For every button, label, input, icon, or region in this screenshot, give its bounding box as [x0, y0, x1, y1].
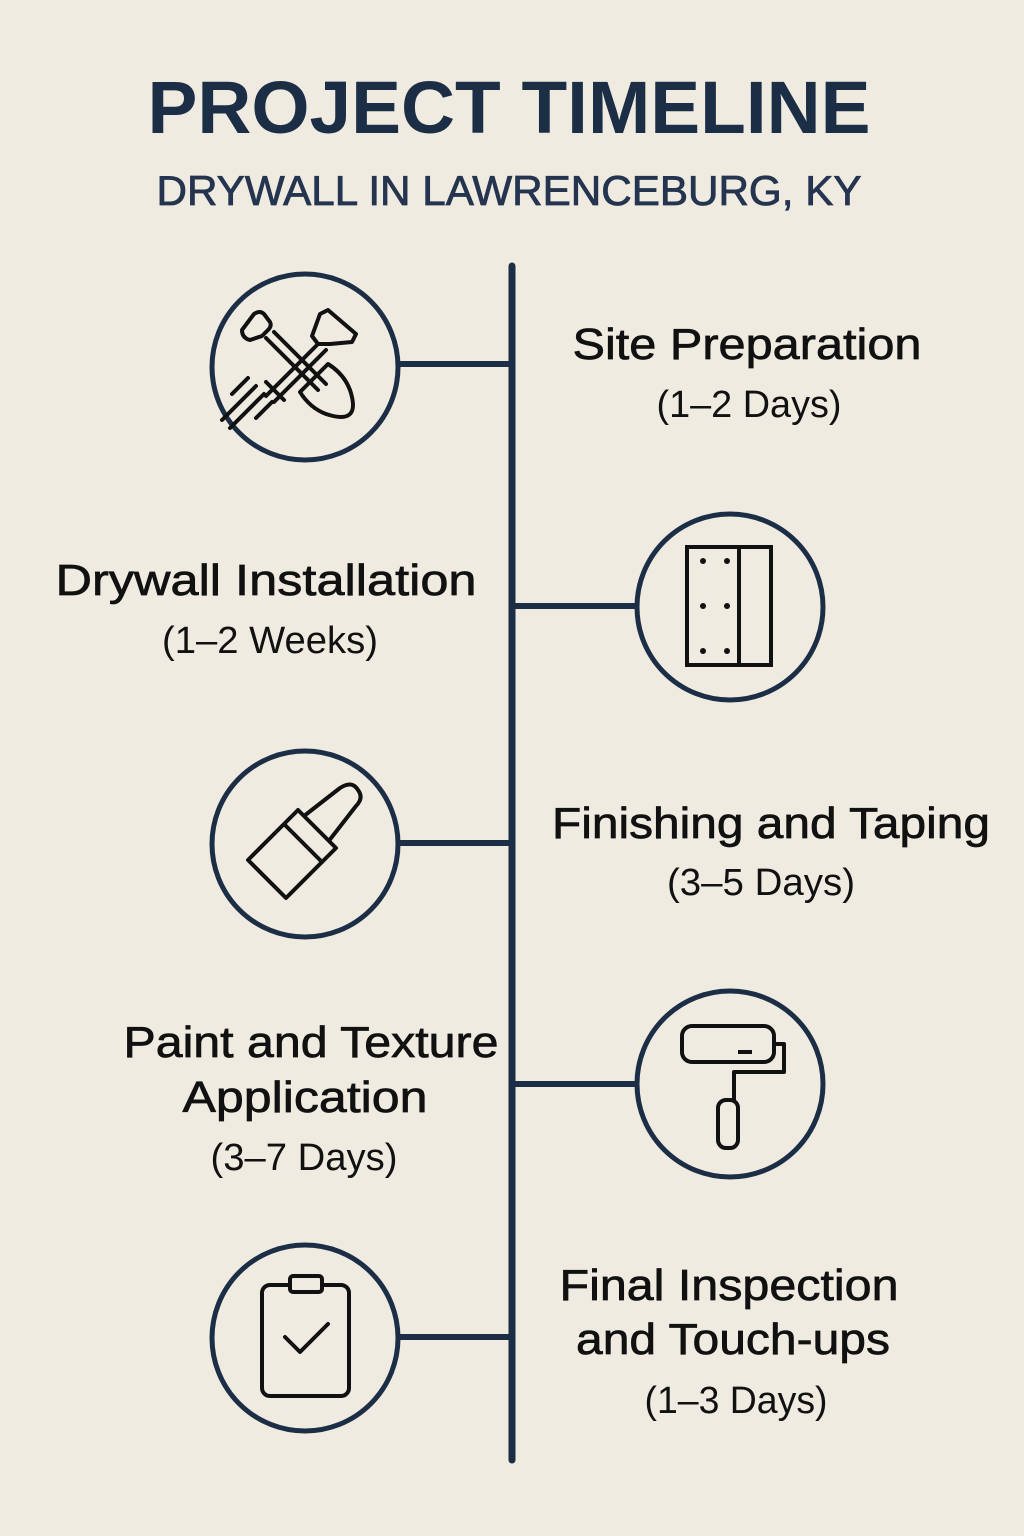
text: final inspection: Final Inspection: [560, 1261, 898, 1310]
step 4: paint and texture: (3–7 Days): [210, 1137, 398, 1179]
text: drywall installation: Drywall Installation: [56, 556, 476, 605]
text: finishing and taping: Finishing and Taping: [552, 799, 990, 848]
step 3: finishing and taping: (3–5 Days): [667, 862, 855, 904]
icon: brush: [248, 784, 361, 898]
text: site preparation: Site Preparation: [572, 320, 922, 369]
icon: shovel and fork: [222, 310, 356, 428]
subtitle: DRYWALL IN LAWRENCEBURG, KY: [156, 167, 862, 214]
step 5: final inspection: (1–3 Days): [644, 1380, 828, 1422]
timeline axis: [508, 266, 516, 1460]
step 5: final inspection: [212, 1245, 898, 1431]
step 1: site preparation: (1–2 Days): [656, 384, 842, 426]
icon: clipboard: [262, 1276, 349, 1396]
step 3: finishing and taping: [212, 751, 990, 937]
step 2: drywall installation: [56, 514, 823, 700]
step 4: paint and texture: [124, 991, 823, 1179]
step 4: paint and texture: Application: [182, 1073, 428, 1122]
step 5: final inspection: and Touch-ups: [576, 1315, 890, 1364]
title: PROJECT TIMELINE: [148, 66, 870, 149]
icon: drywall panel: [687, 547, 771, 665]
icon: paint roller: [682, 1026, 784, 1148]
text: paint and texture: Paint and Texture: [124, 1018, 498, 1067]
step 1: site preparation: [212, 274, 922, 460]
step 2: drywall installation: (1–2 Weeks): [162, 620, 378, 662]
